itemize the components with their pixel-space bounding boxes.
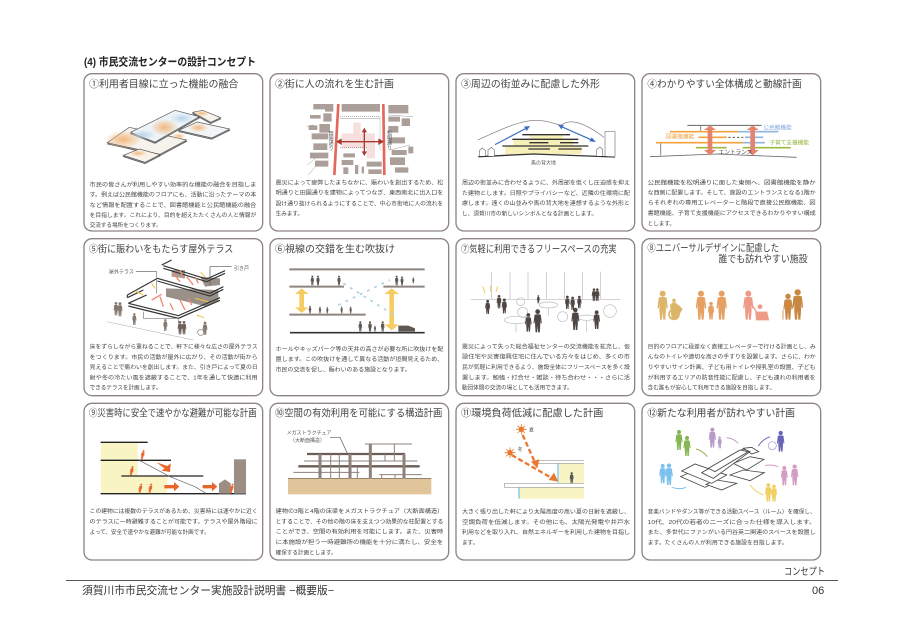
text: panel 9 body: よって、安全で速やかな避難が可能な計画です。 [90, 528, 210, 536]
diagram: isometric terraces: 引き戸 [234, 265, 249, 272]
diagram: site map: 田園通り [328, 131, 334, 152]
text: panel 4 body: な西側に配置します。そして、施設のエントランスとなる1階か [648, 189, 816, 197]
text: panel 2 body: 震災によって疲弊したまちなかに、賑わいを創出するため、松 [276, 179, 444, 187]
diagram: plates with user groups [659, 428, 798, 502]
heading: panel 8: ⑧ユニバーサルデザインに配慮した [647, 242, 779, 255]
text: panel 12 body: 音楽バンドやダンス等ができる活動スペース（ルーム）を確保し、 [648, 508, 816, 516]
diagram: atrium section [289, 269, 425, 333]
panel: 11 environmental load [456, 403, 635, 560]
diagram: structural section: （大断面構造） [290, 437, 325, 444]
text: panel 8 body [648, 342, 816, 392]
text: panel 9 body: のテラスに一時避難することが可能です。テラスや屋外階段に [90, 517, 258, 525]
footer title: 須賀川市市民交流センター実施設計説明書 −概要版− [82, 583, 334, 597]
text: panel 10 body: 確保する計画とします。 [276, 548, 336, 556]
text: panel 10 body [276, 507, 444, 556]
row one [84, 74, 449, 231]
text: panel 8 body: りやすいサイン計画、子ども用トイレや授乳室の設置、子ども [648, 363, 816, 371]
diagram: section with hills: 馬の背大地 [531, 160, 556, 167]
text: panel 12 body [648, 508, 816, 546]
diagram: eaves and sun angles [504, 424, 584, 499]
panel: 10 structure [270, 403, 449, 560]
diagram: site map [307, 104, 413, 175]
heading: panel 4: ④わかりやすい全体構成と動線計画 [647, 78, 802, 91]
text: panel 8 body: が利用するエリアの防音性能に配慮し、子ども連れの利用者を [648, 373, 816, 381]
text: panel 12 body: ます。たくさんの人が利用できる施設を目指します。 [648, 538, 788, 546]
text: panel 5 body [90, 343, 258, 392]
text: panel 7 body: 動団体間の交流の場としても活用できます。 [462, 384, 573, 392]
diagram: site map: 松明通り [386, 129, 392, 151]
text: panel 4 body: らそれぞれの専用エレベーターと階段で直接公民館機能、図 [648, 199, 816, 207]
text: panel 6 body: 置します。この吹抜けを通して異なる活動が垣間見えるため、 [276, 355, 443, 363]
text: panel 5 body: 見えることで賑わいを創出します。また、引き戸によって夏の日 [90, 363, 258, 371]
diagram: isometric terraces [107, 260, 249, 340]
panel: 12 new users [642, 403, 821, 560]
panel: 2 flow of people [270, 74, 449, 231]
diagram: stacked programme section [650, 123, 809, 157]
diagram: universal design figures [657, 289, 803, 320]
text: panel 2 body [276, 179, 444, 217]
text: panel 1 body: 市民の皆さんが利用しやすい効率的な機能の融合を目指しま [90, 180, 256, 188]
diagram: eaves and sun angles: 冬 [518, 446, 523, 453]
heading: panel 8: 誰でも訪れやすい施設 [718, 252, 808, 265]
diagram: stacked programme section: 子育て支援機能 [769, 139, 809, 147]
text: panel 5 body: 床をずらしながら重ねることで、軒下に様々な広さの屋外テラス [90, 343, 258, 351]
text: panel 2 body: 生みます。 [276, 209, 303, 217]
text: panel 12 body: 10代、20代の若者のニーズに合った仕様を導入します。 [648, 518, 816, 526]
panel: 6 atrium sight lines [270, 239, 449, 396]
diagram: stacked programme section: 公民館機能 [763, 123, 792, 131]
text: panel 5 body: 射や冬の冷たい風を遮蔽することで、1年を通して快適に利用 [90, 373, 258, 381]
text: panel 9 body: この建物には複数のテラスがあるため、災害時には速やかに近く [90, 507, 258, 515]
text: panel 12 body: また、多世代にファンがいる円谷英二関連のスペースを設置し [648, 528, 816, 536]
heading: panel 6: ⑥視線の交錯を生む吹抜け [275, 242, 395, 255]
diagram: structural section [287, 430, 431, 494]
panel: 1 functional fusion [84, 74, 263, 231]
text: panel 5 body: をつくります。市民の活動が屋外に広がり、その活動が街から [90, 353, 258, 361]
text: panel 4 body: とします。 [648, 220, 675, 227]
diagram: section with hills [478, 120, 615, 167]
text: panel 7 body [462, 342, 630, 392]
page number: 06 [812, 585, 824, 597]
text: panel 11 body: 大きく張り出した軒により太陽高度の高い夏の日射を遮蔽し、 [462, 508, 630, 516]
text: panel 11 body: 空調負荷を低減します。その他にも、太陽光発電や井戸水 [462, 518, 630, 526]
page heading: (4) 市民交流センターの設計コンセプト [84, 54, 256, 68]
text: panel 7 body: 民が気軽に利用できるよう、施設全体にフリースペースを多く設 [462, 363, 630, 371]
text: panel 8 body: 含む誰もが安心して利用できる施設を目指します。 [648, 384, 775, 392]
heading: panel 8 [647, 242, 808, 265]
text: panel 10 body: 建物の3階と4階の床梁をメガストラクチュア（大断面構造） [276, 507, 443, 515]
text: panel 10 body: に本施設が担う一時避難所の機能を十分に満たし、安全を [276, 538, 443, 546]
panel: 5 outdoor terrace [84, 239, 263, 396]
text: panel 8 body: 目的のフロアに段差なく直接エレベーターで行ける計画とし、み [648, 342, 816, 350]
text: panel 1 body: 交流する場所をつくります。 [90, 221, 162, 229]
text: panel 3 body: た建物とします。日照やプライバシーなど、近隣の住環境に配 [462, 189, 630, 197]
text: panel 1 body [90, 180, 257, 229]
heading: panel 11: ⑪環境負荷低減に配慮した計画 [461, 407, 603, 420]
text: panel 4 body: 書館機能、子育て支援機能にアクセスできるわかりやすい構成 [648, 209, 816, 217]
text: panel 6 body: ホールやキッズパーク等の天井の高さが必要な所に吹抜けを配 [276, 345, 444, 353]
diagram: stacked programme section: 図書館機能 [666, 132, 695, 140]
text: panel 3 body: 周辺の街並みに合わせるように、外周部を低くし圧迫感を抑え [462, 179, 630, 187]
section label: コンセプト [784, 566, 825, 578]
text: panel 7 body: 設住宅や災害復興住宅に住んでいる方々をはじめ、多くの市 [462, 353, 630, 361]
text: panel 11 body [462, 508, 630, 546]
diagram: eaves and sun angles: 夏 [529, 428, 534, 434]
text: panel 7 body: 置します。勉強・打合せ・雑談・待ち合わせ・・・さらに活 [462, 373, 630, 381]
text: panel 8 body: んなのトイレや適切な高さの手すりを設置します。さらに、わか [648, 353, 816, 361]
heading: panel 2: ②街に人の流れを生む計画 [275, 78, 394, 91]
row two [84, 239, 449, 396]
text: panel 5 body: できるテラスを計画します。 [90, 384, 161, 392]
diagram: stacked floor plates [105, 110, 230, 164]
panel: 7 free space [456, 239, 635, 396]
text: panel 10 body: とすることで、その他の階の床を支えつつ効果的な柱配置とする [276, 517, 443, 525]
text: panel 1 body: など情報を配置することで、図書館機能と公民館機能の融合 [90, 201, 257, 209]
text: panel 3 body: し、須賀川市の新しいシンボルとなる計画とします。 [462, 209, 597, 217]
text: panel 2 body: 明通りと田園通りを建物によってつなぎ、東西南北に出入口を [276, 189, 443, 197]
diagram: stacked programme section: エントランス [719, 149, 753, 156]
diagram: structural section: メガストラクチュア [287, 430, 331, 437]
text: panel 9 body [90, 507, 258, 536]
diagram: free space silhouettes [471, 272, 620, 332]
text: panel 3 body: 慮します。遠くの山並みや馬の背大地を連想するような外形と [462, 199, 630, 207]
text: panel 7 body: 震災によって失った総合福祉センターの交流機能を拡充し、仮 [462, 342, 630, 350]
text: panel 1 body: を目指します。これにより、目的を超えたたくさんの人と情報が [90, 211, 257, 219]
text: panel 11 body: ます。 [462, 539, 478, 546]
text: panel 6 body: 市民の交流を促し、賑わいのある施設となります。 [276, 365, 411, 373]
text: panel 1 body: す。例えば公民館機能のフロアにも、活動に沿ったテーマの本 [90, 191, 257, 199]
heading: panel 12: ⑫新たな利用者が訪れやすい計画 [647, 407, 795, 420]
diagram: isometric terraces: 屋外テラス [109, 269, 134, 276]
heading: panel 7: ⑦気軽に利用できるフリースペースの充実 [461, 242, 617, 255]
panel: 9 evacuation [84, 403, 263, 560]
diagram: evacuation section [101, 442, 246, 494]
row three [84, 403, 449, 560]
heading: panel 1: ①利用者目線に立った機能の融合 [89, 78, 238, 91]
heading: panel 9: ⑨災害時に安全で速やかな避難が可能な計画 [89, 407, 257, 420]
heading: panel 5: ⑤街に賑わいをもたらす屋外テラス [89, 242, 233, 255]
text: panel 4 body: 公民館機能を松明通りに面した東側へ、図書館機能を静か [648, 179, 816, 187]
text: panel 6 body [276, 345, 444, 373]
text: panel 3 body [462, 179, 630, 217]
text: panel 10 body: ことができ、空間の有効利用を可能にします。また、災害時 [276, 528, 444, 536]
panel: 4 composition and circulation [642, 74, 821, 231]
text: panel 4 body [648, 179, 816, 227]
heading: panel 10: ⑩空間の有効利用を可能にする構造計画 [275, 407, 442, 420]
text: panel 11 body: 利用などを取り入れ、自然エネルギーを利用した建物を目指し [462, 528, 630, 536]
panel: 8 universal design [642, 239, 821, 396]
panel: 3 exterior form [456, 74, 635, 231]
text: panel 2 body: 設け通り抜けられるようにすることで、中心市街地に人の流れを [276, 199, 443, 207]
heading: panel 3: ③周辺の街並みに配慮した外形 [461, 78, 600, 91]
